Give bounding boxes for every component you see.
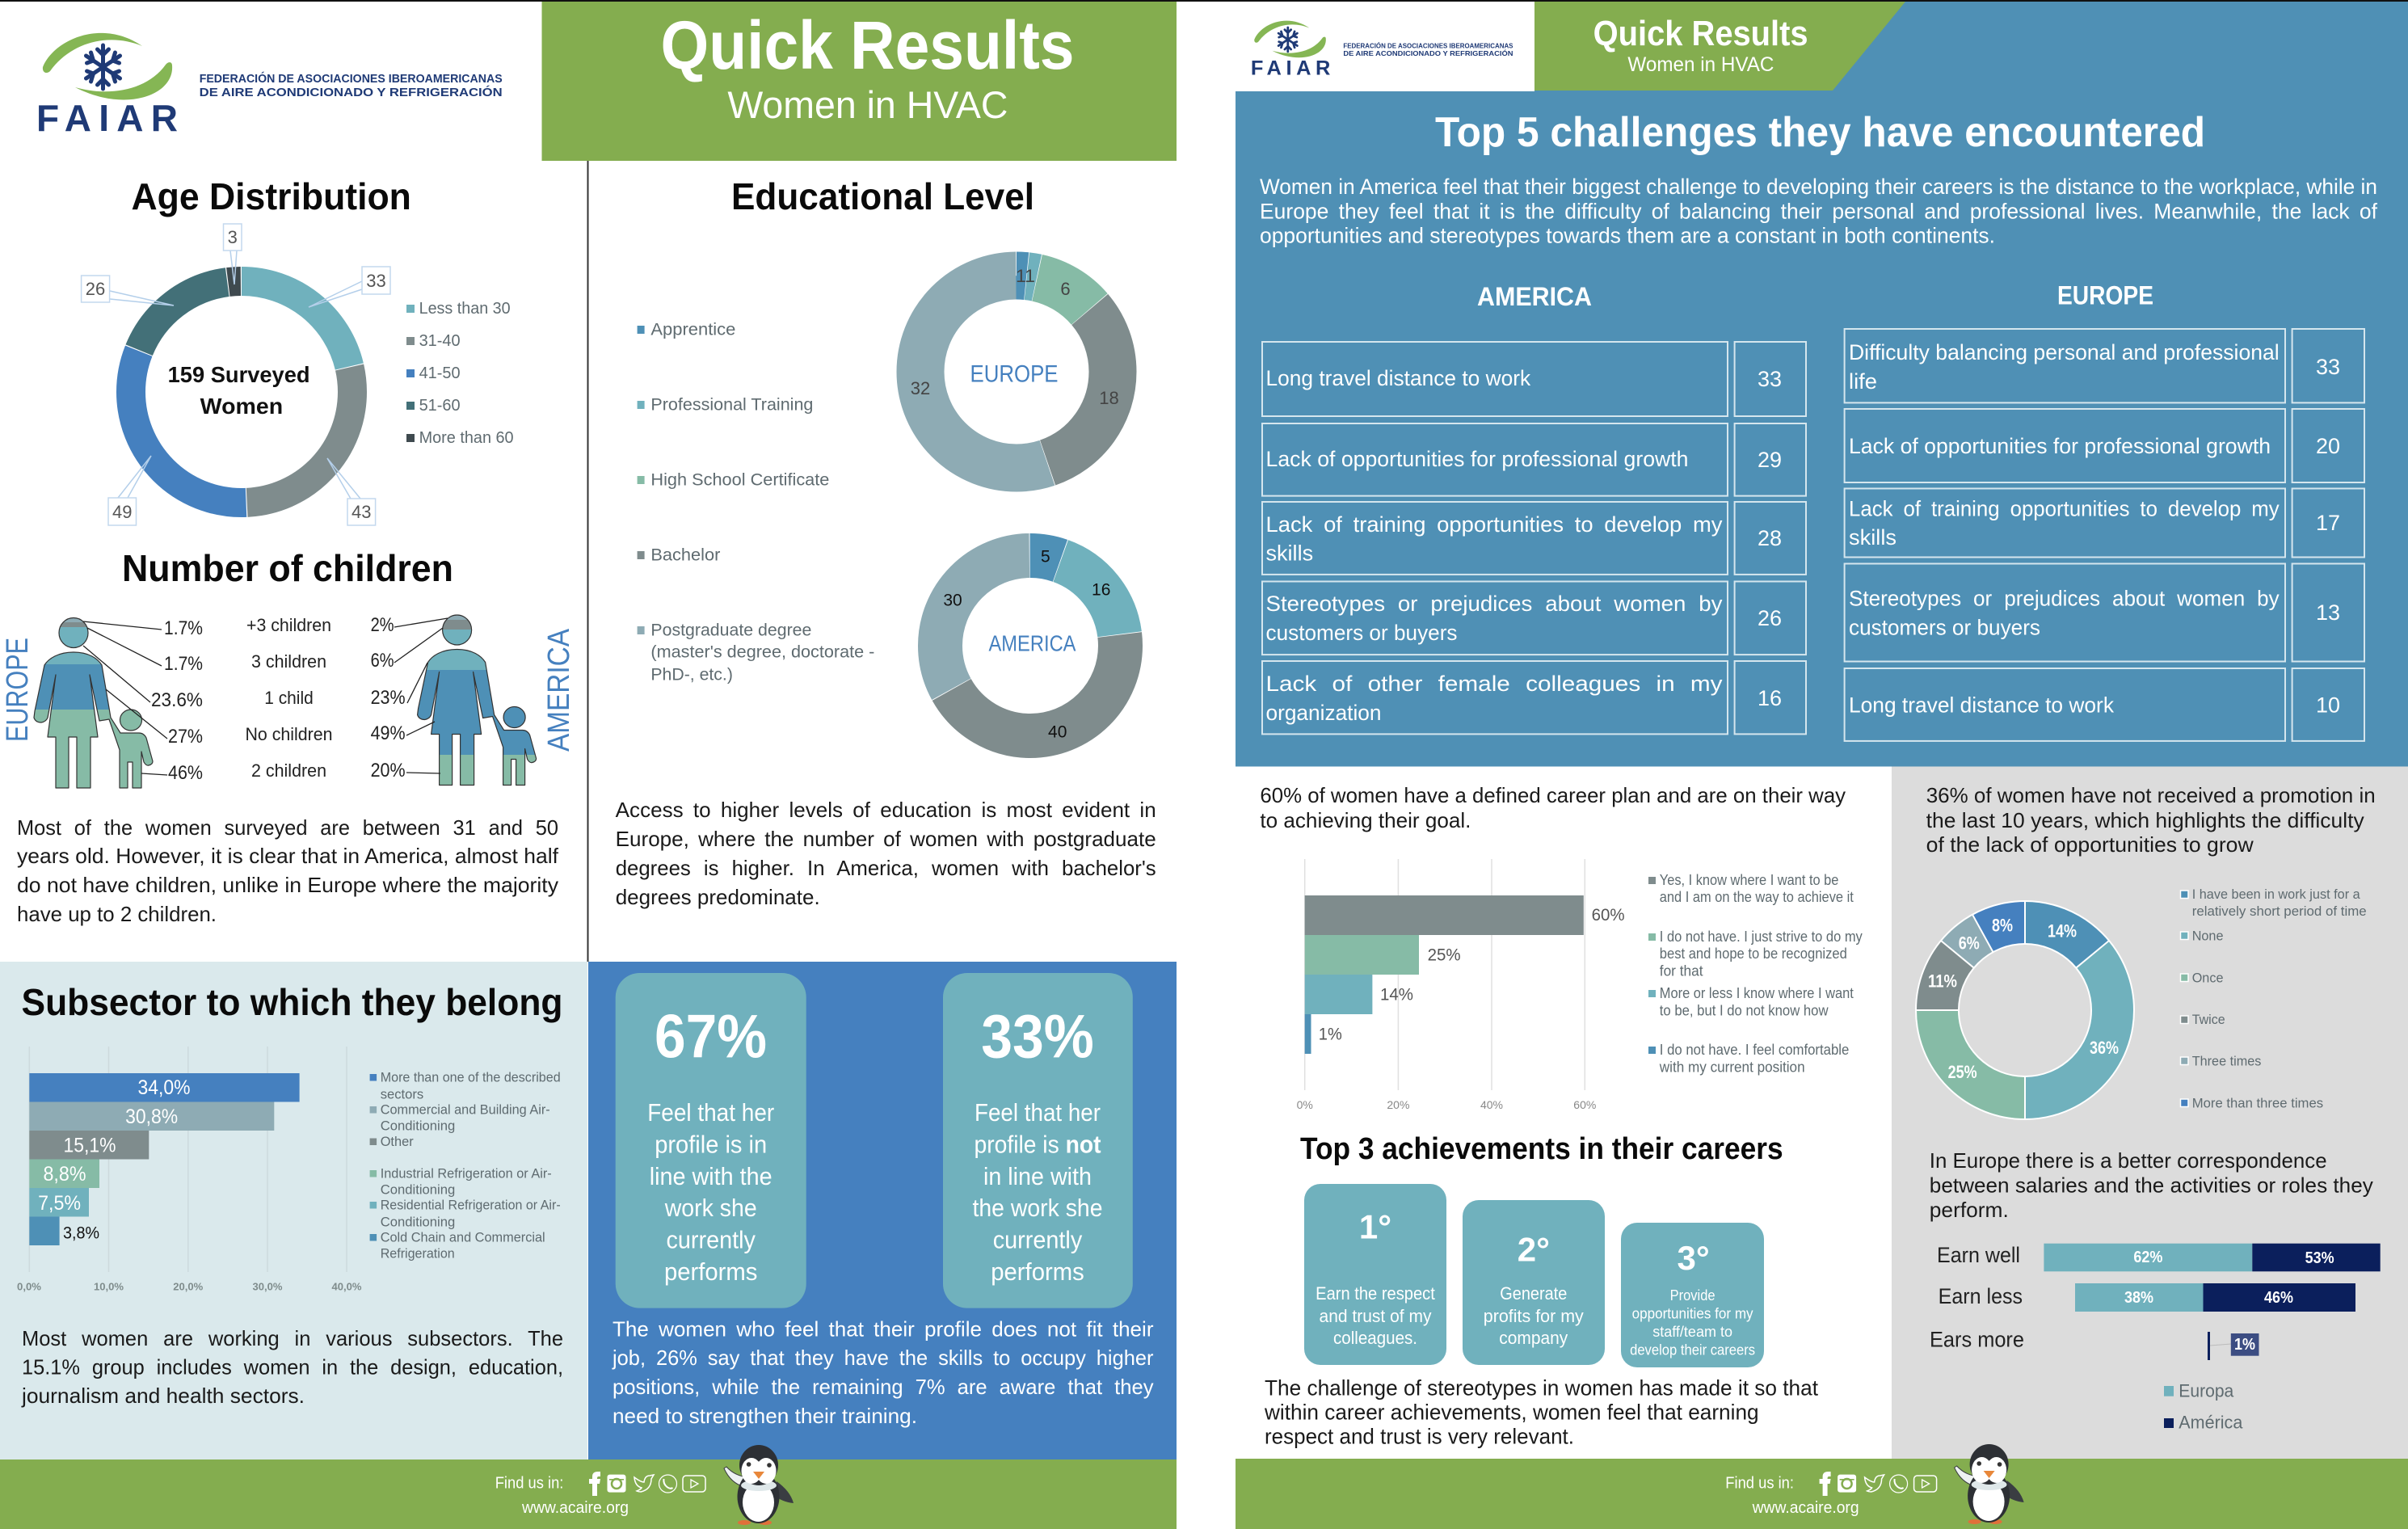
- card: achievement 3: develop their careers: [1630, 1342, 1755, 1358]
- legend: promotions: More than three times: [2192, 1096, 2323, 1110]
- text: profile summary: job, 26% say that they have the skills to occupy higher: [612, 1346, 1154, 1370]
- legend: educational level: [638, 320, 874, 684]
- bar chart: salaries: [1930, 1243, 2381, 1360]
- bar chart: career plan: 60%: [1592, 906, 1625, 925]
- legend: promotions: Twice: [2192, 1012, 2225, 1027]
- card: achievement 1: [1304, 1184, 1446, 1365]
- logo: FAIAR small: [1251, 21, 1513, 80]
- bar chart: subsector: 3,8%: [63, 1224, 99, 1243]
- donut chart: education Europe: EUROPE: [970, 360, 1059, 388]
- labels: Europe children percentages: 1.7%: [164, 653, 203, 675]
- header banner: Women in HVAC: [1627, 53, 1774, 76]
- table: Europe challenges: skills: [1849, 525, 1897, 550]
- donut chart: education America: AMERICA: [989, 630, 1076, 656]
- donut chart: education Europe: 18: [1099, 388, 1119, 408]
- header banner: Quick Results: [661, 7, 1075, 83]
- labels: America children percentages: 20%: [371, 760, 406, 781]
- heading: educational level: Educational Level: [731, 175, 1034, 217]
- bar chart: career plan: 20%: [1387, 1098, 1409, 1111]
- logo: FAIAR: DE AIRE ACONDICIONADO Y REFRIGERACIÓN: [200, 85, 503, 99]
- table: Europe challenges: 10: [2316, 693, 2340, 718]
- bar chart: salaries: 62%: [2133, 1249, 2163, 1266]
- card: 33 percent: the work she: [973, 1194, 1102, 1222]
- table: America challenges: skills: [1265, 541, 1313, 566]
- legend: career plan: More or less I know where I want: [1660, 985, 1854, 1001]
- text: promotions: the last 10 years, which highlights the difficulty: [1926, 808, 2364, 832]
- text: age and children summary: do not have children, unlike in Europe where the majority: [17, 873, 558, 897]
- footer: right page: www.acaire.org: [1752, 1499, 1859, 1517]
- bar chart: subsector: 30,8%: [125, 1106, 178, 1128]
- donut chart: education Europe: 32: [911, 378, 930, 398]
- legend: career plan: and I am on the way to achieve it: [1660, 889, 1854, 905]
- legend: career plan: [1648, 872, 1863, 1076]
- labels: number of children categories: 2 children: [251, 760, 326, 781]
- table: America challenges: 28: [1758, 526, 1782, 550]
- legend: career plan: Yes, I know where I want to be: [1660, 872, 1838, 888]
- card: 67 percent: line with the: [650, 1162, 772, 1190]
- panel: profile fit: [588, 962, 1177, 1460]
- bar chart: salaries: 1%: [2234, 1336, 2255, 1354]
- text: achievements summary: within career achievements, women feel that earning: [1264, 1401, 1759, 1425]
- bar chart: subsector: 15,1%: [63, 1135, 116, 1157]
- panel: subsector: [0, 962, 587, 1460]
- table: Europe challenges: Lack of opportunities for professional growth: [1849, 434, 2271, 458]
- legend: age distribution: Less than 30: [419, 300, 511, 318]
- text: education summary: Access to higher levels of education is most evident in: [616, 798, 1156, 822]
- table: Europe challenges: 33: [2316, 355, 2340, 379]
- icons: social media: [589, 1472, 705, 1496]
- labels: America children percentages: 6%: [371, 650, 394, 672]
- card: 67 percent: currently: [666, 1226, 756, 1254]
- card: achievement 1: Earn the respect: [1316, 1283, 1435, 1304]
- table: Europe challenges: Long travel distance to work: [1849, 693, 2114, 718]
- table: America challenges: Lack of other female colleagues in my: [1265, 672, 1723, 696]
- card: 33 percent: profile is not: [975, 1130, 1101, 1159]
- logo: FAIAR: FAIAR: [36, 97, 178, 139]
- text: salaries: perform.: [1930, 1198, 2009, 1222]
- donut chart: education America: 40: [1048, 722, 1067, 742]
- text: achievements summary: respect and trust is very relevant.: [1265, 1425, 1574, 1449]
- labels: number of children categories: No children: [246, 724, 333, 744]
- legend: promotions: [2180, 887, 2367, 1110]
- legend: subsector: Other: [381, 1134, 414, 1149]
- card: achievement 1: 1°: [1359, 1208, 1391, 1246]
- text: achievements summary: [1264, 1376, 1818, 1449]
- panel: career plan and achievements: [1260, 783, 1863, 1449]
- donut chart: promotions: 36%: [2090, 1038, 2119, 1058]
- bar chart: subsector: 34,0%: [137, 1076, 191, 1099]
- labels: Europe children percentages: 1.7%: [164, 617, 203, 639]
- legend: age distribution: 31-40: [419, 332, 461, 350]
- footer: left page: [0, 1445, 1177, 1529]
- bar chart: salaries: 38%: [2124, 1289, 2153, 1307]
- text: subsector summary: journalism and health sectors.: [21, 1384, 305, 1408]
- legend: educational level: PhD-, etc.): [650, 666, 733, 684]
- card: 67 percent: 67%: [655, 1003, 767, 1072]
- text: age and children summary: Most of the women surveyed are between 31 and 50: [17, 815, 558, 840]
- legend: career plan: with my current position: [1659, 1059, 1805, 1076]
- card: achievement 3: opportunities for my: [1632, 1306, 1753, 1322]
- panel: promotions and salaries: [1892, 766, 2408, 1460]
- legend: subsector: Cold Chain and Commercial: [381, 1230, 545, 1245]
- logo: FAIAR small: FAIAR: [1251, 57, 1330, 80]
- legend: salaries: Europa: [2179, 1380, 2234, 1401]
- donut chart: education America: 30: [943, 592, 962, 609]
- legend: subsector: Conditioning: [381, 1118, 455, 1133]
- text: career plan: [1260, 783, 1846, 832]
- text: education summary: degrees predominate.: [616, 885, 820, 909]
- legend: promotions: None: [2192, 928, 2224, 944]
- text: promotions: of the lack of opportunities to grow: [1926, 832, 2254, 857]
- legend: subsector: [370, 1070, 561, 1261]
- heading: top 3 achievements: Top 3 achievements in their careers: [1300, 1132, 1783, 1166]
- text: subsector summary: Most women are working in various subsectors. The: [22, 1326, 563, 1350]
- donut chart: promotions: [1916, 901, 2134, 1119]
- text: age and children summary: years old. However, it is clear that in America, almost half: [17, 844, 559, 868]
- footer: left page: Find us in:: [495, 1475, 563, 1493]
- text: promotions: [1926, 783, 2376, 857]
- card: 33 percent: performs: [991, 1257, 1084, 1286]
- legend: subsector: sectors: [381, 1086, 423, 1102]
- card: 67 percent: Feel that her: [647, 1098, 774, 1127]
- text: profile summary: positions, while the remaining 7% are aware that they: [613, 1375, 1154, 1399]
- legend: career plan: for that: [1660, 963, 1703, 979]
- labels: Europe children percentages: 46%: [168, 762, 203, 784]
- table: Europe challenges: 20: [2316, 434, 2340, 458]
- legend: career plan: to be, but I do not know how: [1660, 1003, 1829, 1019]
- heading: age distribution: Age Distribution: [131, 175, 411, 217]
- text: salaries: [1930, 1148, 2373, 1222]
- bar chart: subsector: [17, 1047, 362, 1293]
- bar chart: career plan: 14%: [1380, 986, 1413, 1005]
- table: America challenges: 29: [1758, 448, 1782, 472]
- text: salaries: between salaries and the activities or roles they: [1930, 1173, 2373, 1198]
- table: Europe challenges: life: [1849, 369, 1877, 394]
- text: age and children summary: [17, 815, 559, 926]
- footer: left page: www.acaire.org: [521, 1499, 629, 1517]
- card: 67 percent: [616, 973, 806, 1308]
- legend: educational level: Bachelor: [650, 546, 720, 564]
- donut chart: education America: 16: [1092, 580, 1110, 600]
- donut chart: promotions: 8%: [1992, 915, 2013, 936]
- donut chart: education Europe: 6: [1060, 279, 1071, 299]
- donut chart: promotions: 25%: [1948, 1062, 1977, 1082]
- text: career plan: to achieving their goal.: [1260, 808, 1471, 832]
- text: challenges intro: Europe they feel that it is the difficulty of balancing their personal and professional lives. Meanwhile, the lack of: [1260, 199, 2377, 223]
- legend: promotions: Three times: [2192, 1054, 2261, 1068]
- legend: career plan: I do not have. I feel comfortable: [1660, 1042, 1849, 1058]
- bar chart: subsector: 30,0%: [252, 1280, 283, 1293]
- bar chart: salaries: Earn less: [1939, 1284, 2023, 1308]
- donut chart: promotions: 11%: [1928, 971, 1957, 991]
- header banner: Women in HVAC: [727, 83, 1008, 126]
- labels: America children percentages: [371, 614, 406, 781]
- table: Europe challenges: customers or buyers: [1849, 616, 2040, 640]
- card: 33 percent: 33%: [981, 1003, 1094, 1072]
- table: America challenges: Stereotypes or prejudices about women by: [1265, 592, 1723, 616]
- card: achievement 2: company: [1499, 1328, 1568, 1348]
- legend: subsector: Commercial and Building Air-: [381, 1102, 550, 1117]
- left page: [0, 2, 1177, 1529]
- heading: subsector: Subsector to which they belong: [21, 981, 562, 1023]
- card: 33 percent: currently: [993, 1226, 1083, 1254]
- donut chart: age distribution: 26: [86, 279, 105, 299]
- table: Europe challenges: [1845, 329, 2364, 741]
- logo: FAIAR: [36, 33, 503, 139]
- legend: age distribution: More than 60: [419, 429, 514, 447]
- donut chart: age distribution: 159 Surveyed: [168, 362, 310, 387]
- donut chart: education America: [941, 548, 1120, 742]
- heading: top 5 challenges: Top 5 challenges they have encountered: [1435, 109, 2205, 156]
- bar chart: salaries: 53%: [2305, 1249, 2334, 1267]
- bar chart: subsector: 8,8%: [44, 1163, 86, 1186]
- card: 33 percent: in line with: [983, 1162, 1092, 1190]
- legend: career plan: I do not have. I just strive to do my: [1660, 929, 1863, 945]
- donut chart: education America: 5: [1041, 548, 1050, 566]
- panel: top challenges: [1236, 2, 2408, 766]
- bar chart: career plan: 1%: [1319, 1026, 1342, 1044]
- header banner: Quick Results: [1593, 14, 1808, 53]
- text: challenges intro: Women in America feel that their biggest challenge to developing their careers is the distance to the workplace, while in: [1260, 175, 2377, 199]
- card: achievement 2: Generate: [1500, 1283, 1567, 1304]
- logo: FAIAR small: FEDERACIÓN DE ASOCIACIONES IBEROAMERICANAS: [1343, 42, 1513, 49]
- text: challenges intro: [1260, 175, 2377, 248]
- table: America challenges: Long travel distance to work: [1265, 366, 1531, 390]
- bar chart: career plan: 0%: [1297, 1098, 1313, 1111]
- pictogram: Europe family: [34, 617, 153, 788]
- bar chart: career plan: 60%: [1573, 1098, 1596, 1111]
- icons: social media: [1820, 1472, 1937, 1496]
- labels: America children percentages: 23%: [371, 687, 406, 709]
- bar chart: subsector: 20,0%: [173, 1280, 204, 1293]
- donut chart: education Europe: [911, 266, 1119, 468]
- legend: subsector: Conditioning: [381, 1214, 455, 1230]
- legend: promotions: Once: [2192, 970, 2224, 986]
- legend: promotions: relatively short period of time: [2192, 904, 2367, 919]
- bar chart: subsector: 0,0%: [17, 1280, 41, 1293]
- donut chart: age distribution: 49: [112, 502, 132, 522]
- icon: penguin mascot: [1955, 1444, 2024, 1524]
- bar chart: subsector: 10,0%: [94, 1280, 124, 1293]
- table: America challenges: customers or buyers: [1265, 621, 1458, 645]
- text: subsector summary: 15.1% group includes women in the design, education,: [22, 1354, 563, 1379]
- right page: [1236, 2, 2408, 1529]
- legend: salaries: América: [2179, 1413, 2243, 1432]
- header banner: [541, 2, 1177, 161]
- table: Europe challenges: Lack of training opportunities to develop my: [1849, 496, 2280, 520]
- donut chart: education Europe: 11: [1016, 266, 1035, 286]
- donut chart: age distribution: [82, 224, 390, 525]
- donut chart: age distribution: 3: [228, 227, 238, 247]
- labels: number of children categories: 1 child: [264, 688, 314, 708]
- table: America challenges: [1262, 342, 1806, 734]
- legend: promotions: I have been in work just for a: [2192, 887, 2360, 902]
- donut chart: age distribution: Women: [200, 394, 283, 419]
- pictogram: America family: [418, 615, 537, 786]
- bar chart: subsector: 40,0%: [331, 1280, 362, 1293]
- bar chart: salaries: Earn well: [1937, 1243, 2020, 1267]
- bar chart: salaries: 46%: [2264, 1289, 2293, 1307]
- card: achievement 1: and trust of my: [1319, 1306, 1432, 1326]
- text: challenges intro: opportunities and stereotypes towards them are a constant in both continents.: [1260, 224, 1995, 248]
- bar chart: subsector: 7,5%: [38, 1192, 81, 1215]
- legend: educational level: High School Certificate: [650, 470, 829, 490]
- legend: subsector: Refrigeration: [381, 1246, 455, 1261]
- heading: America: AMERICA: [1477, 282, 1592, 311]
- header logo area: [1236, 2, 1534, 91]
- labels: Europe children percentages: 27%: [168, 726, 203, 748]
- bar chart: salaries: Ears more: [1930, 1328, 2024, 1352]
- card: 33 percent: [943, 973, 1133, 1308]
- bar chart: career plan: [1297, 859, 1625, 1111]
- text: salaries: In Europe there is a better correspondence: [1930, 1148, 2327, 1173]
- legend: subsector: Industrial Refrigeration or Air-: [381, 1165, 552, 1182]
- legend: educational level: Postgraduate degree: [650, 621, 811, 640]
- card: achievement 3: 3°: [1678, 1239, 1710, 1277]
- card: achievement 3: staff/team to: [1652, 1324, 1732, 1340]
- table: America challenges: 33: [1758, 367, 1782, 391]
- card: achievement 3: [1621, 1223, 1764, 1367]
- label: Europe vertical: EUROPE: [1, 638, 35, 742]
- donut chart: age distribution: 43: [352, 502, 372, 522]
- card: 67 percent: work she: [664, 1194, 757, 1222]
- table: America challenges: 26: [1758, 606, 1782, 630]
- card: achievement 1: colleagues.: [1333, 1328, 1417, 1348]
- legend: educational level: (master's degree, doctorate -: [650, 643, 874, 661]
- labels: America children percentages: 2%: [371, 614, 394, 636]
- table: America challenges: organization: [1265, 701, 1382, 725]
- header banner: [1534, 2, 1905, 91]
- labels: Europe children percentages: [151, 617, 203, 784]
- legend: age distribution: 51-60: [419, 397, 461, 415]
- card: 33 percent: Feel that her: [975, 1098, 1101, 1127]
- card: 67 percent: performs: [664, 1257, 757, 1286]
- legend: subsector: Conditioning: [381, 1182, 455, 1198]
- table: Europe challenges: 17: [2316, 511, 2340, 535]
- labels: number of children categories: +3 children: [246, 615, 331, 635]
- legend: career plan: best and hope to be recognized: [1660, 946, 1847, 962]
- top edge line: [0, 0, 2408, 2]
- card: achievement 2: profits for my: [1484, 1306, 1584, 1326]
- text: education summary: [616, 798, 1156, 909]
- text: profile summary: The women who feel that their profile does not fit their: [613, 1317, 1154, 1342]
- text: achievements summary: The challenge of stereotypes in women has made it so that: [1265, 1376, 1818, 1401]
- table: America challenges: Lack of training opportunities to develop my: [1265, 512, 1723, 537]
- legend: salaries: [2164, 1380, 2243, 1432]
- heading: Europe: EUROPE: [2057, 281, 2153, 310]
- legend: educational level: Apprentice: [650, 320, 735, 339]
- card: achievement 3: Provide: [1670, 1287, 1715, 1304]
- text: age and children summary: have up to 2 children.: [17, 902, 217, 926]
- legend: subsector: Residential Refrigeration or Air-: [381, 1198, 561, 1212]
- card: achievement 2: 2°: [1518, 1231, 1550, 1269]
- logo: FAIAR: FEDERACIÓN DE ASOCIACIONES IBEROAMERICANAS: [200, 71, 503, 86]
- donut chart: promotions: 14%: [2048, 921, 2077, 941]
- logo: FAIAR small: DE AIRE ACONDICIONADO Y REFRIGERACIÓN: [1343, 50, 1513, 57]
- bar chart: career plan: 25%: [1428, 946, 1461, 965]
- text: profile summary: [612, 1317, 1154, 1428]
- legend: age distribution: 41-50: [419, 364, 461, 382]
- donut chart: age distribution: 33: [366, 271, 386, 291]
- labels: Europe children percentages: 23.6%: [151, 689, 203, 711]
- table: Europe challenges: Difficulty balancing personal and professional: [1849, 340, 2280, 364]
- card: 67 percent: profile is in: [655, 1130, 767, 1159]
- column divider: [587, 161, 588, 962]
- card: achievement 2: [1463, 1200, 1605, 1365]
- legend: subsector: More than one of the described: [381, 1070, 561, 1085]
- label: America vertical: AMERICA: [542, 628, 576, 752]
- leader lines: children pictograms: [83, 618, 448, 775]
- legend: educational level: Professional Training: [650, 396, 813, 414]
- text: career plan: 60% of women have a defined career plan and are on their way: [1260, 783, 1846, 807]
- icon: penguin mascot: [724, 1445, 794, 1525]
- table: America challenges: Lack of opportunities for professional growth: [1265, 447, 1689, 471]
- table: Europe challenges: Stereotypes or prejudices about women by: [1849, 587, 2280, 611]
- text: profile summary: need to strengthen their training.: [613, 1404, 917, 1428]
- footer: right page: Find us in:: [1725, 1475, 1794, 1493]
- table: America challenges: 16: [1758, 686, 1782, 710]
- legend: age distribution: [406, 300, 514, 447]
- labels: America children percentages: 49%: [371, 722, 406, 744]
- text: promotions: 36% of women have not received a promotion in: [1926, 783, 2376, 807]
- labels: number of children categories: 3 children: [251, 651, 326, 672]
- text: education summary: Europe, where the number of women with postgraduate: [616, 827, 1156, 851]
- footer: right page: [1236, 1444, 2408, 1529]
- donut chart: promotions: 6%: [1959, 933, 1980, 954]
- table: Europe challenges: 13: [2316, 600, 2340, 625]
- text: education summary: degrees is higher. In America, women with bachelor's: [616, 856, 1156, 880]
- bar chart: career plan: 40%: [1480, 1098, 1503, 1111]
- labels: number of children categories: [246, 615, 333, 781]
- text: subsector summary: [21, 1326, 563, 1408]
- heading: number of children: Number of children: [122, 547, 453, 589]
